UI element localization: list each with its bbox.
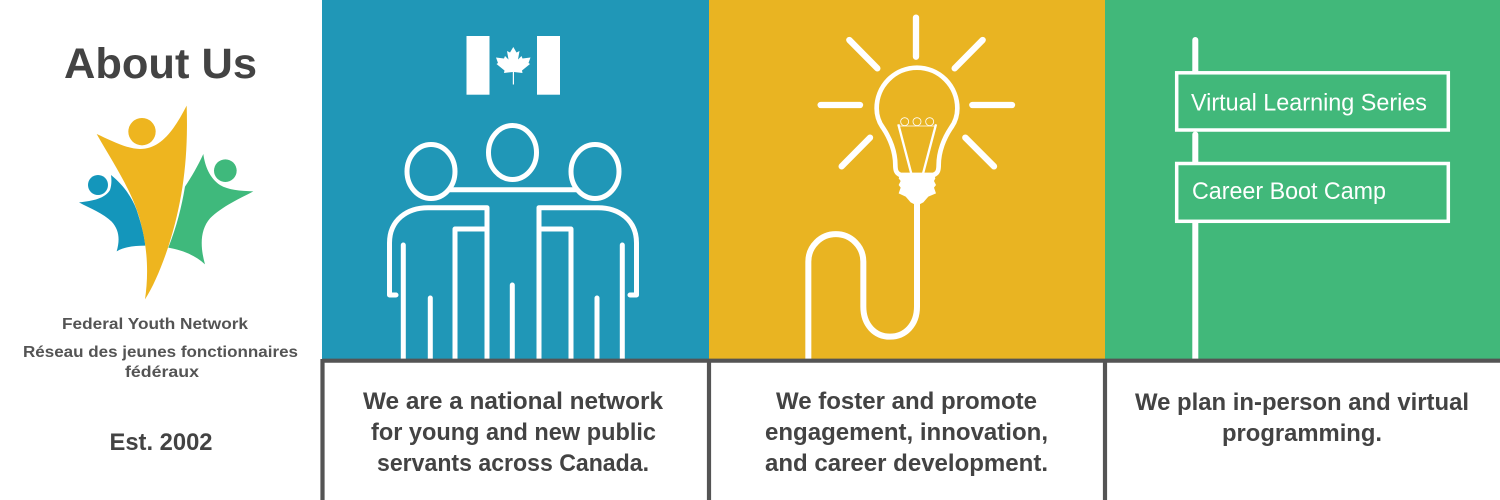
text: English network name: Federal Youth Network — [62, 316, 248, 333]
text: caption national network: We are a national network — [363, 388, 664, 415]
text: caption engagement: engagement, innovation, — [765, 419, 1048, 446]
text: caption programming — [1135, 389, 1469, 447]
icon: Canadian flag — [466, 36, 560, 95]
text: caption national network: for young and new public — [371, 419, 656, 446]
sign: Virtual Learning Series: Virtual Learning Series — [1191, 90, 1427, 116]
sign: Career Boot Camp — [1177, 164, 1448, 221]
sign: Virtual Learning Series — [1177, 73, 1448, 130]
icon: Federal Youth Network logo — [79, 106, 253, 299]
text: French network name: Réseau des jeunes fonctionnaires — [23, 344, 298, 361]
caption grid lines — [322, 359, 1500, 500]
panel: programming — [1105, 0, 1500, 359]
text: caption national network: servants across Canada. — [377, 450, 649, 477]
icon: signpost pole — [1192, 40, 1198, 359]
sign: Career Boot Camp: Career Boot Camp — [1192, 178, 1386, 205]
text: caption engagement — [765, 388, 1048, 477]
panel: national network — [322, 0, 709, 359]
heading: About Us: About Us — [64, 40, 257, 88]
panel: engagement and innovation — [709, 0, 1105, 359]
text: French network name: fédéraux — [125, 364, 199, 381]
text: established year: Est. 2002 — [110, 429, 212, 456]
text: caption engagement: We foster and promote — [776, 388, 1037, 415]
panel: about us sidebar — [23, 40, 298, 456]
icon: three people — [390, 126, 636, 359]
text: caption programming: We plan in-person and virtual — [1135, 389, 1469, 416]
text: caption engagement: and career development. — [765, 450, 1048, 477]
text: French network name — [23, 344, 298, 381]
text: caption national network — [363, 388, 664, 477]
icon: light bulb — [808, 18, 1012, 359]
text: caption programming: programming. — [1222, 420, 1382, 447]
